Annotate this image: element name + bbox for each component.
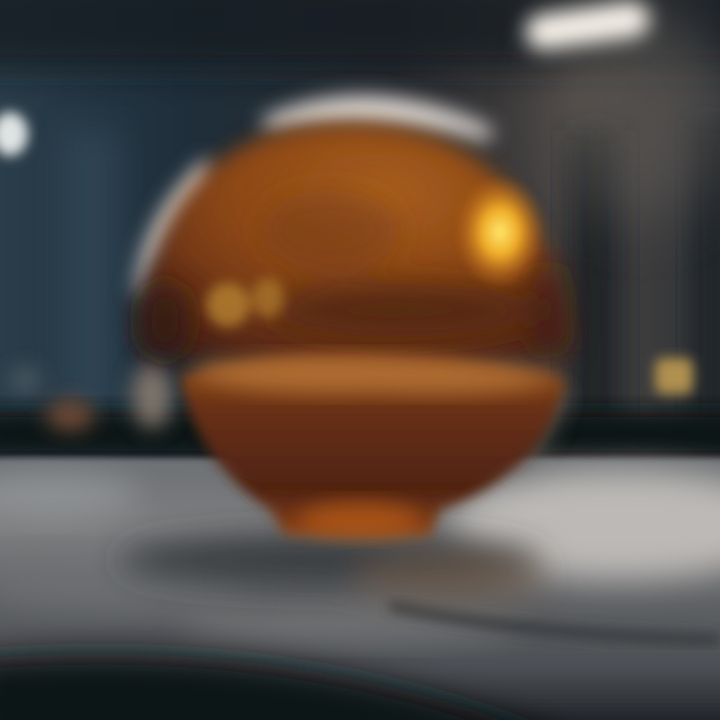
glass rim highlights	[132, 102, 558, 468]
sphere upper amber dome	[140, 122, 572, 368]
distant warm lights, left	[9, 366, 94, 431]
warm reflection, left of the dome	[206, 278, 284, 327]
liquid surface band	[185, 355, 560, 393]
sphere shadow on table	[120, 534, 545, 602]
ceiling light, left	[0, 112, 28, 156]
dark shading inside the dome	[140, 190, 566, 360]
glowing base of the sphere	[300, 502, 420, 538]
ceiling light, top right	[523, 0, 652, 52]
sphere lower bowl	[180, 356, 565, 535]
table surface	[0, 458, 720, 720]
bright glare on the sphere	[454, 174, 546, 290]
distant lamp, right	[655, 358, 693, 394]
